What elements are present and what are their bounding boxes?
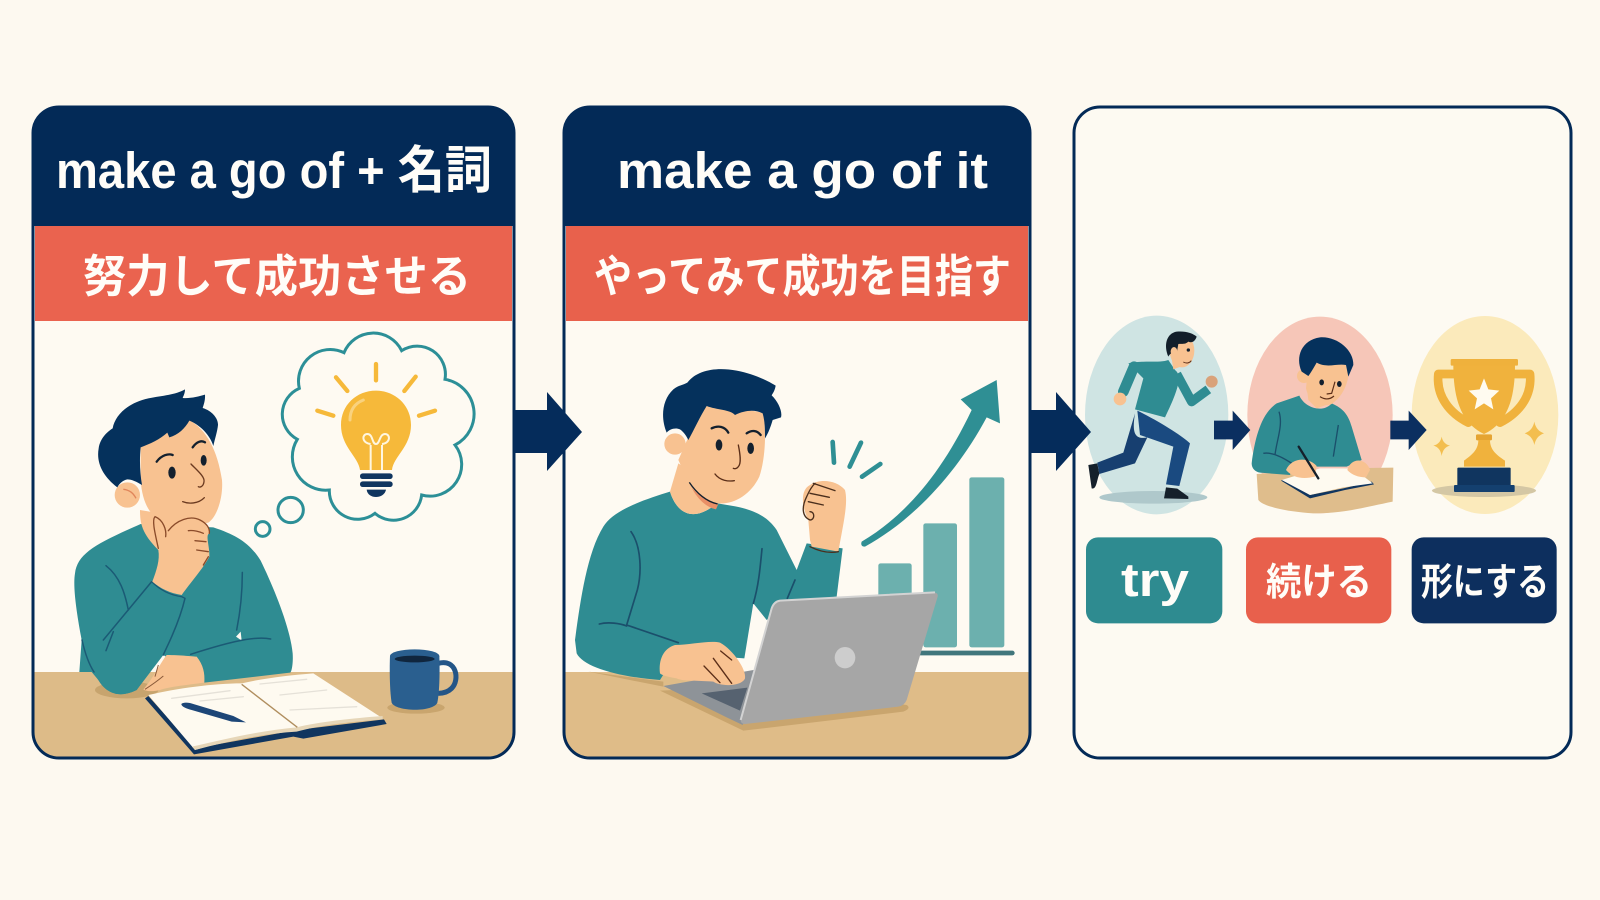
meaning: やってみて成功を目指す xyxy=(594,251,1011,302)
panel: make a go of + noun xyxy=(33,107,514,762)
table top xyxy=(564,672,1030,762)
step 2: writer xyxy=(1247,317,1393,513)
raised fist xyxy=(803,481,846,552)
arrow: panel 2 to panel 3 xyxy=(1030,392,1091,471)
step 1: runner xyxy=(1085,316,1228,514)
meaning: 努力して成功させる xyxy=(83,251,471,302)
man xyxy=(74,389,293,698)
thought cloud with lightbulb xyxy=(255,333,474,536)
illustration: thinking man xyxy=(74,333,474,754)
label text: give shape: 形にする xyxy=(1421,562,1549,604)
open book and pen xyxy=(145,673,387,754)
panel border xyxy=(33,107,514,758)
hand on laptop xyxy=(660,642,745,685)
header band xyxy=(564,107,1030,226)
heading: make a go of it xyxy=(617,142,988,199)
step 3: trophy xyxy=(1412,316,1558,514)
man xyxy=(575,369,846,687)
small arrow: try to continue xyxy=(1214,411,1250,450)
header band xyxy=(33,107,514,226)
laptop xyxy=(660,592,938,731)
effort marks xyxy=(833,442,880,477)
panel: make a go of it xyxy=(564,107,1030,762)
small arrow: continue to result xyxy=(1390,411,1427,450)
arrow: panel 1 to panel 2 xyxy=(514,392,582,471)
label text: try: try xyxy=(1121,553,1189,606)
label: give shape xyxy=(1412,537,1557,623)
illustration: man at laptop xyxy=(575,369,1015,731)
label: try xyxy=(1086,537,1222,623)
subheader band xyxy=(35,226,512,321)
coffee mug xyxy=(387,649,456,714)
panel border xyxy=(564,107,1030,758)
heading: make a go of + 名詞 xyxy=(56,142,492,199)
growth bars and rising arrow xyxy=(861,380,1015,655)
label: continue xyxy=(1246,537,1391,623)
label text: continue: 続ける xyxy=(1266,562,1372,604)
table top xyxy=(33,672,514,762)
panel: try, continue, give it shape xyxy=(1074,107,1571,758)
subheader band xyxy=(566,226,1028,321)
